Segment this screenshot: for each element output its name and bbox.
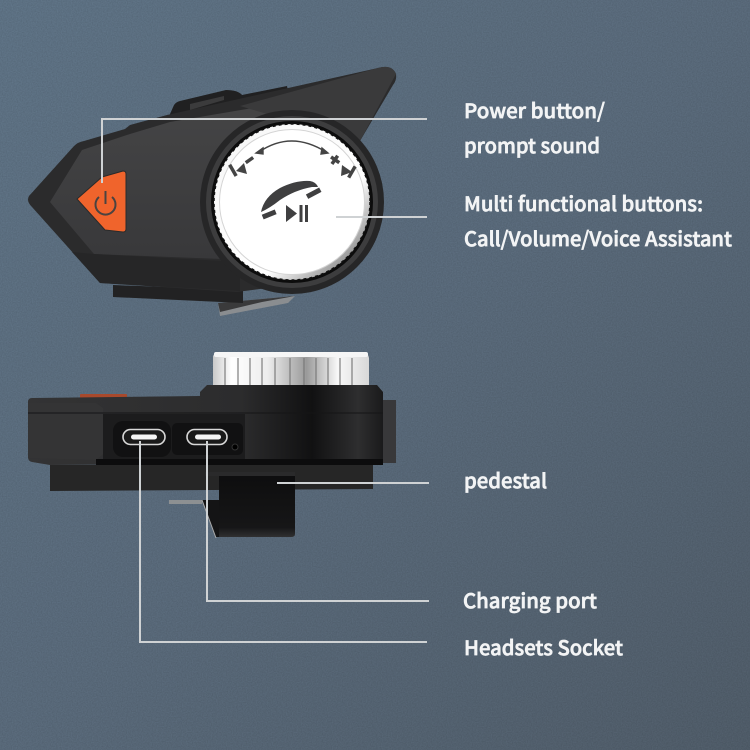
side view device xyxy=(28,352,396,538)
label: multi functional buttons xyxy=(464,188,732,252)
left body facet xyxy=(28,403,103,460)
pedestal xyxy=(50,465,373,491)
orange button edge xyxy=(80,394,127,398)
label: power button: prompt sound xyxy=(464,130,600,159)
metal knob xyxy=(213,352,369,385)
label: multi functional buttons: Multi functional buttons: xyxy=(464,188,703,217)
metal clip xyxy=(169,472,295,538)
orange power button xyxy=(77,171,126,232)
label: pedestal: pedestal xyxy=(464,465,547,494)
previous track minus icon xyxy=(228,156,254,177)
body centre plate xyxy=(50,100,300,262)
dial arc arrow xyxy=(256,141,328,154)
body upper right facet xyxy=(240,67,396,141)
device body xyxy=(28,67,396,292)
line: headsets socket xyxy=(140,441,427,642)
icon: power symbol xyxy=(95,191,116,215)
label: power button: Power button/ xyxy=(464,95,605,124)
lower mount clip xyxy=(113,285,295,316)
leader lines xyxy=(102,119,429,642)
line: multi functional buttons xyxy=(336,216,427,218)
label: charging port: Charging port xyxy=(463,585,597,614)
phone and play pause icon xyxy=(261,181,321,222)
port panel xyxy=(103,414,245,462)
base shadow xyxy=(96,459,383,465)
port 1: headset socket xyxy=(113,421,171,457)
right tab xyxy=(381,400,396,463)
label: multi functional buttons: Call/Volume/Voice Assistant xyxy=(464,223,732,252)
top view device xyxy=(28,67,396,316)
body seam xyxy=(28,412,383,414)
body lower facet xyxy=(72,252,240,291)
control dial xyxy=(200,110,384,294)
main side body xyxy=(28,385,383,465)
label: headsets socket: Headsets Socket xyxy=(464,632,623,661)
line: charging port xyxy=(207,441,429,601)
label: power button xyxy=(464,95,605,159)
top slider button xyxy=(170,86,290,125)
next track plus icon xyxy=(330,155,357,178)
line: power button xyxy=(102,119,427,183)
line: pedestal xyxy=(277,482,429,484)
port 2: charging port xyxy=(172,423,243,455)
